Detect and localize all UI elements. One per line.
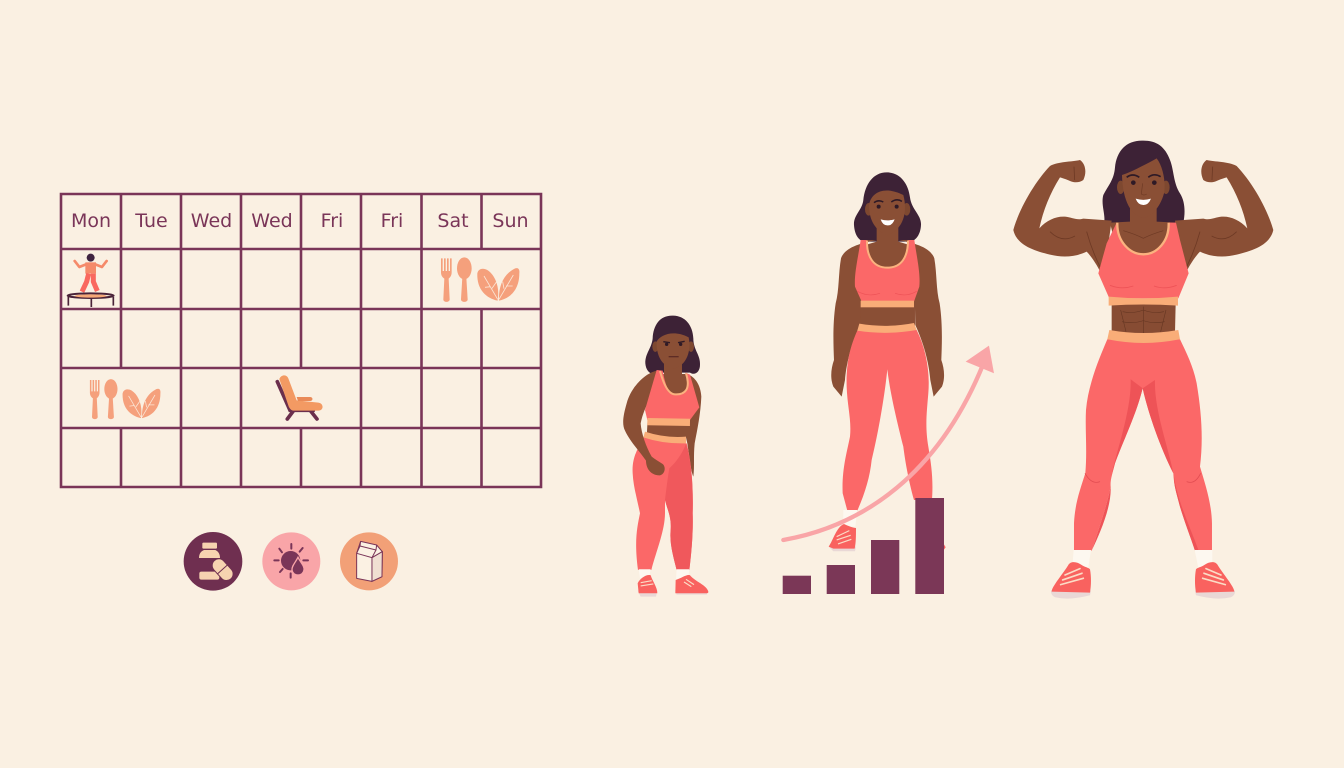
icon: fork spoon and leaves, Wednesday — [90, 379, 160, 419]
midriff with abs — [1112, 304, 1176, 333]
weekday labels: Fri — [321, 210, 343, 232]
icon: vitamin D sun and drop — [262, 532, 320, 590]
panel: supplement icons — [184, 532, 398, 591]
sports top — [1098, 223, 1189, 298]
leggings — [633, 437, 693, 570]
weekday labels — [71, 210, 529, 232]
chart: ascending bars — [783, 498, 944, 594]
weekday labels: Fri — [381, 210, 403, 232]
leggings — [843, 330, 932, 511]
weekday labels: Sat — [437, 210, 469, 232]
left shoe — [1051, 562, 1091, 599]
socks and shoes — [639, 569, 689, 579]
icon: fork spoon and leaves, Saturday — [441, 257, 519, 302]
hair — [645, 316, 700, 374]
hair — [854, 172, 921, 242]
top hem band — [1109, 297, 1178, 306]
icon: milk carton — [340, 532, 398, 590]
icon: supplement bottle and pill — [184, 532, 242, 591]
torso skin — [860, 227, 915, 327]
right shoe — [1195, 562, 1235, 599]
face — [652, 333, 694, 369]
socks — [1073, 550, 1212, 569]
face — [865, 190, 910, 235]
left arm — [831, 240, 877, 397]
sports top — [855, 240, 920, 302]
weekday labels: Wed — [191, 210, 232, 232]
figure: small woman, starting stage — [623, 316, 708, 597]
figure: muscular woman, final stage — [1013, 141, 1273, 599]
icon: lounge chair — [277, 375, 323, 419]
sock and shoe — [843, 510, 857, 527]
right arm — [899, 240, 944, 397]
panel: weekly calendar — [61, 194, 541, 487]
muscle lines — [1050, 167, 1237, 267]
calendar grid — [61, 194, 541, 487]
right flexed arm — [1175, 160, 1273, 280]
face — [1117, 158, 1170, 218]
torso and far arm skin — [647, 362, 701, 477]
legging shading — [1092, 379, 1199, 551]
left flexed arm — [1013, 160, 1112, 280]
weekday labels: Wed — [251, 210, 293, 232]
near arm — [623, 371, 665, 475]
weekday labels: Sun — [492, 210, 529, 232]
hair — [1103, 141, 1185, 223]
weekday labels: Mon — [71, 210, 111, 232]
sports top — [645, 370, 699, 420]
neck and chest — [1110, 208, 1177, 256]
chart: rising arrow — [783, 346, 994, 540]
waistband — [643, 432, 686, 443]
figure: medium woman, middle stage — [829, 172, 946, 551]
icon: person on trampoline — [68, 254, 114, 307]
other shoe hint behind bar — [943, 543, 946, 551]
leggings — [1074, 339, 1212, 551]
weekday labels: Tue — [134, 210, 168, 232]
shaded far leg — [665, 444, 693, 570]
